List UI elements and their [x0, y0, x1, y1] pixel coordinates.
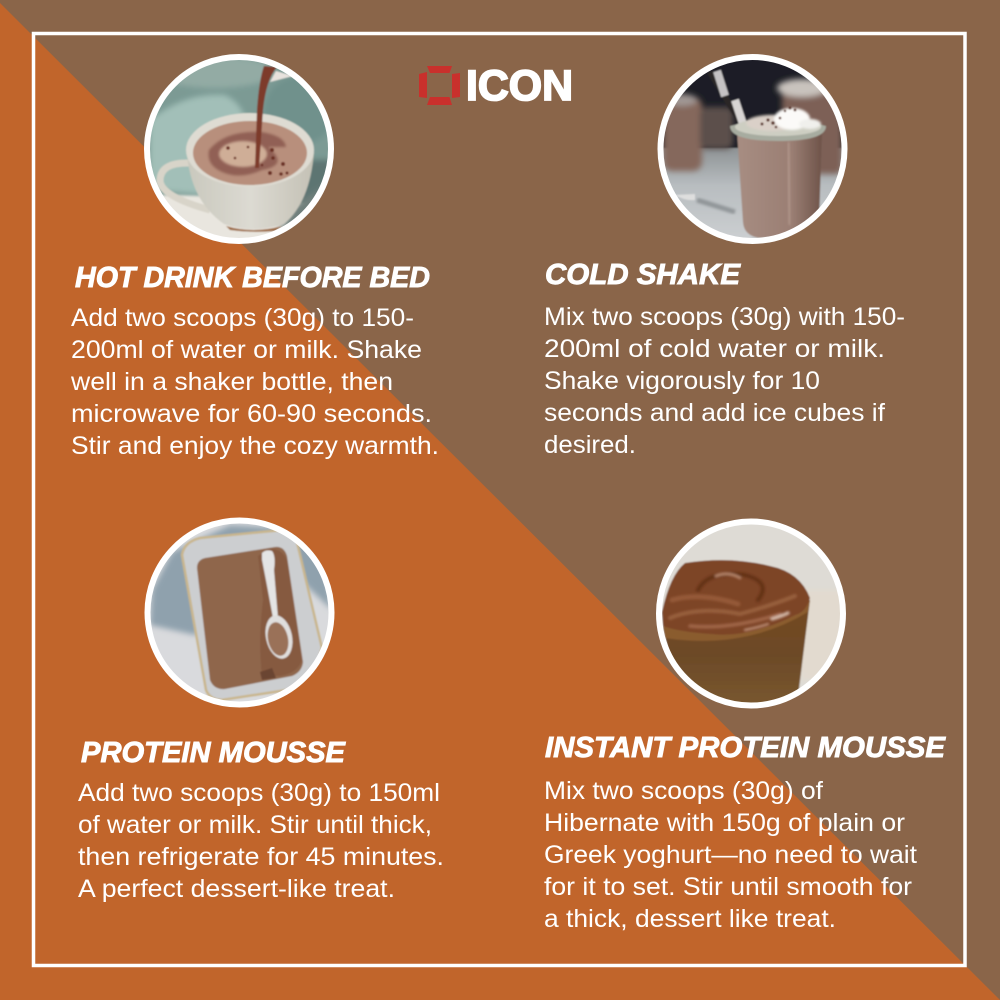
- body text: a thick, dessert like treat.: [544, 905, 836, 933]
- heading: COLD SHAKE: [545, 259, 742, 291]
- body text: microwave for 60-90 seconds.: [71, 400, 432, 428]
- body text: Mix two scoops (30g) of: [544, 777, 823, 805]
- body text: of water or milk. Stir until thick,: [78, 811, 432, 839]
- saucer: [162, 194, 303, 238]
- spoon on table: [675, 194, 695, 200]
- panel: protein mousse: [78, 518, 444, 903]
- glass dish: [182, 530, 322, 700]
- cup handle: [160, 163, 210, 210]
- body text: [544, 303, 905, 459]
- panel: cold shake: [544, 55, 905, 459]
- photo: hot chocolate being poured into a cup: [150, 60, 328, 238]
- heading: INSTANT PROTEIN MOUSSE: [545, 732, 947, 764]
- body text: Shake vigorously for 10: [544, 367, 820, 395]
- pitcher: [270, 71, 293, 82]
- photo ring: [148, 520, 332, 704]
- logo: ICON: [419, 62, 573, 110]
- panel: instant protein mousse: [544, 518, 947, 933]
- body text: [70, 304, 439, 460]
- logo wordmark: ICON: [466, 62, 573, 110]
- body text: [544, 777, 917, 933]
- photo ring: [659, 522, 843, 706]
- whipped cream: [746, 108, 821, 131]
- glass rim: [663, 600, 810, 641]
- glass: [663, 600, 810, 712]
- photo: instant mousse overflowing a glass: [662, 524, 840, 702]
- heading: PROTEIN MOUSSE: [81, 737, 347, 769]
- body text: Mix two scoops (30g) with 150-: [544, 303, 905, 331]
- photo ring: [147, 57, 331, 241]
- pouring stream: [255, 66, 277, 168]
- body text: 200ml of cold water or milk.: [544, 335, 885, 363]
- heading: HOT DRINK BEFORE BED: [75, 262, 430, 294]
- body text: [78, 779, 444, 903]
- body text: for it to set. Stir until smooth for: [544, 873, 912, 901]
- glass of shake: [737, 132, 822, 238]
- mousse: [197, 547, 303, 689]
- body text: then refrigerate for 45 minutes.: [78, 843, 444, 871]
- striped straw: [710, 71, 744, 128]
- body text: A perfect dessert-like treat.: [78, 875, 395, 903]
- body text: 200ml of water or milk. Shake: [71, 336, 422, 364]
- mousse dome: [662, 560, 810, 635]
- photo: chocolate shake in a glass jar: [664, 60, 842, 238]
- icon: red square mark: [419, 66, 460, 105]
- cup rim: [186, 113, 314, 187]
- body text: Add two scoops (30g) to 150ml: [78, 779, 440, 807]
- body text: Add two scoops (30g) to 150-: [71, 304, 414, 332]
- body text: Greek yoghurt—no need to wait: [544, 841, 917, 869]
- cup body: [187, 152, 314, 229]
- body text: well in a shaker bottle, then: [70, 368, 393, 396]
- body text: Stir and enjoy the cozy warmth.: [71, 432, 439, 460]
- body text: desired.: [544, 431, 636, 459]
- photo: chocolate mousse in a glass dish: [150, 524, 328, 702]
- body text: Hibernate with 150g of plain or: [544, 809, 905, 837]
- cocoa surface: [193, 121, 307, 185]
- spoon: [262, 550, 278, 618]
- photo ring: [660, 57, 844, 241]
- jar rim: [729, 123, 827, 142]
- body text: seconds and add ice cubes if: [544, 399, 885, 427]
- panel: hot drink before bed: [70, 55, 439, 460]
- towel: [150, 525, 332, 635]
